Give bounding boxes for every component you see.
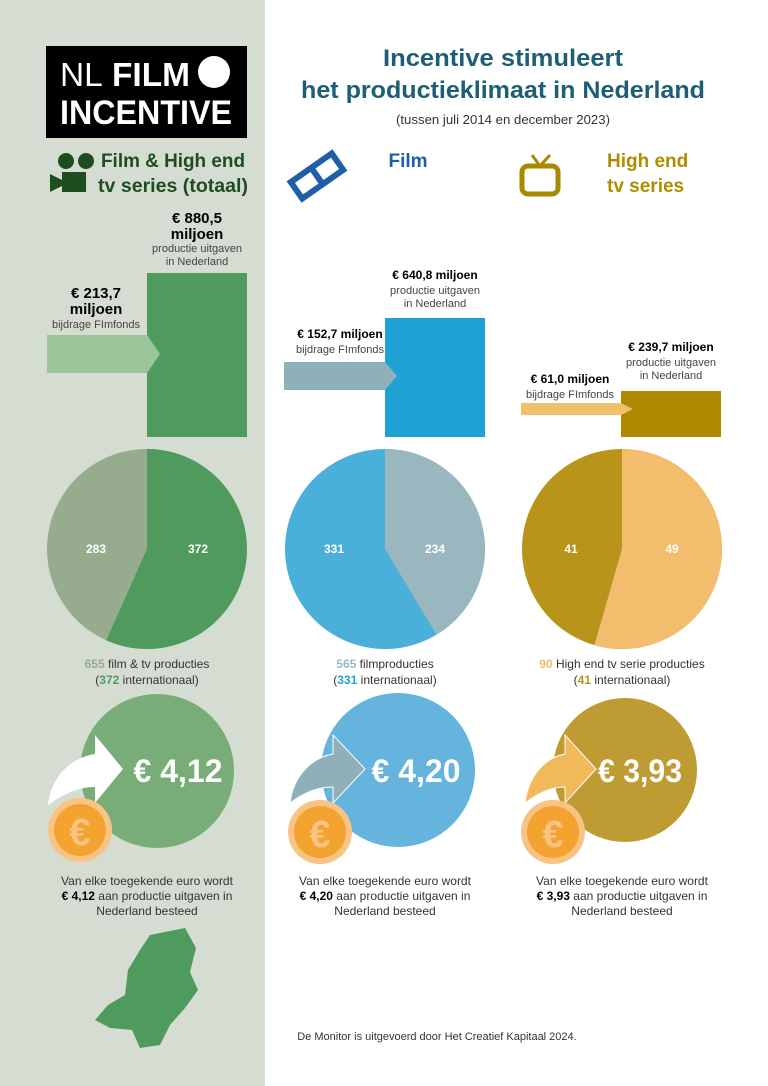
multiplier captions bbox=[61, 874, 709, 918]
multiplier col2: € 4,20 bbox=[372, 753, 460, 789]
pie col3: 41 bbox=[564, 542, 578, 556]
bars col2: € 640,8 miljoen bbox=[392, 268, 478, 282]
heading: high end: tv series bbox=[607, 176, 684, 197]
heading: totaal bbox=[50, 151, 248, 197]
pie col2 bbox=[285, 449, 485, 649]
pie captions bbox=[85, 657, 705, 687]
bars col2: € 152,7 miljoen bbox=[297, 327, 383, 341]
icon: tv bbox=[522, 155, 558, 194]
left background panel bbox=[0, 0, 265, 1086]
multiplier col1: € bbox=[69, 812, 91, 854]
bars col2: productie uitgaven bbox=[390, 285, 480, 297]
pie captions: 655 film & tv producties bbox=[85, 657, 209, 671]
multiplier col1 bbox=[48, 694, 234, 862]
icon: film strip bbox=[287, 149, 347, 203]
bars col3: in Nederland bbox=[640, 370, 702, 382]
multiplier captions: € 3,93 aan productie uitgaven in bbox=[537, 889, 707, 903]
bars col3: bijdrage FImfonds bbox=[526, 389, 615, 401]
pie col3: 49 bbox=[665, 542, 679, 556]
heading: high end: High end bbox=[607, 151, 688, 172]
footer: De Monitor is uitgevoerd door Het Creatief Kapitaal 2024. bbox=[297, 1031, 577, 1043]
logo bbox=[46, 46, 247, 138]
multiplier captions: € 4,12 aan productie uitgaven in bbox=[62, 889, 232, 903]
bars col3: € 239,7 miljoen bbox=[628, 340, 714, 354]
multiplier col3 bbox=[521, 698, 697, 864]
pie captions: (41 internationaal) bbox=[574, 673, 670, 687]
multiplier col2: € bbox=[309, 814, 331, 856]
pie col1: 372 bbox=[188, 542, 208, 556]
multiplier col2 bbox=[288, 693, 475, 864]
multiplier captions: Nederland besteed bbox=[571, 904, 673, 918]
multiplier col3: € 3,93 bbox=[598, 753, 682, 789]
bars col2 bbox=[284, 268, 485, 437]
multiplier captions: Van elke toegekende euro wordt bbox=[536, 874, 709, 888]
multiplier col3: € bbox=[542, 814, 564, 856]
logo: INCENTIVE bbox=[60, 94, 232, 132]
multiplier captions: Nederland besteed bbox=[96, 904, 198, 918]
pie col2: 331 bbox=[324, 542, 344, 556]
multiplier captions: € 4,20 aan productie uitgaven in bbox=[300, 889, 470, 903]
bars col2: in Nederland bbox=[404, 298, 466, 310]
bars col1: productie uitgaven bbox=[152, 243, 242, 255]
pie captions: 90 High end tv serie producties bbox=[539, 657, 705, 671]
bars col1: € 213,7 bbox=[71, 285, 121, 302]
bars col1: bijdrage FImfonds bbox=[52, 319, 141, 331]
multiplier captions: Nederland besteed bbox=[334, 904, 436, 918]
bars col2: bijdrage FImfonds bbox=[296, 344, 385, 356]
multiplier col1: € 4,12 bbox=[134, 753, 222, 789]
title: het productieklimaat in Nederland bbox=[301, 77, 705, 104]
heading: totaal: tv series (totaal) bbox=[98, 176, 248, 197]
heading: high end bbox=[607, 151, 688, 197]
heading: totaal: Film & High end bbox=[101, 151, 245, 172]
pie col3 bbox=[522, 449, 722, 649]
heading: film: Film bbox=[388, 151, 428, 172]
title: (tussen juli 2014 en december 2023) bbox=[396, 112, 610, 127]
bars col3: € 61,0 miljoen bbox=[531, 372, 609, 386]
pie col1 bbox=[47, 449, 247, 649]
pie captions: (331 internationaal) bbox=[333, 673, 437, 687]
multiplier captions: Van elke toegekende euro wordt bbox=[299, 874, 472, 888]
bars col3: productie uitgaven bbox=[626, 357, 716, 369]
map of Netherlands bbox=[95, 928, 198, 1048]
title: Incentive stimuleert bbox=[383, 45, 623, 72]
multiplier captions: Van elke toegekende euro wordt bbox=[61, 874, 234, 888]
pie captions: (372 internationaal) bbox=[95, 673, 199, 687]
bars col1: in Nederland bbox=[166, 256, 228, 268]
bars col1: miljoen bbox=[70, 301, 122, 318]
bars col3 bbox=[521, 340, 721, 437]
logo: NL FILM bbox=[60, 56, 190, 93]
pie col2: 234 bbox=[425, 542, 445, 556]
bars col1: miljoen bbox=[171, 226, 223, 243]
bars col1: € 880,5 bbox=[172, 210, 222, 227]
pie captions: 565 filmproducties bbox=[336, 657, 434, 671]
bars col1 bbox=[47, 210, 247, 437]
title bbox=[301, 45, 705, 127]
pie col1: 283 bbox=[86, 542, 106, 556]
